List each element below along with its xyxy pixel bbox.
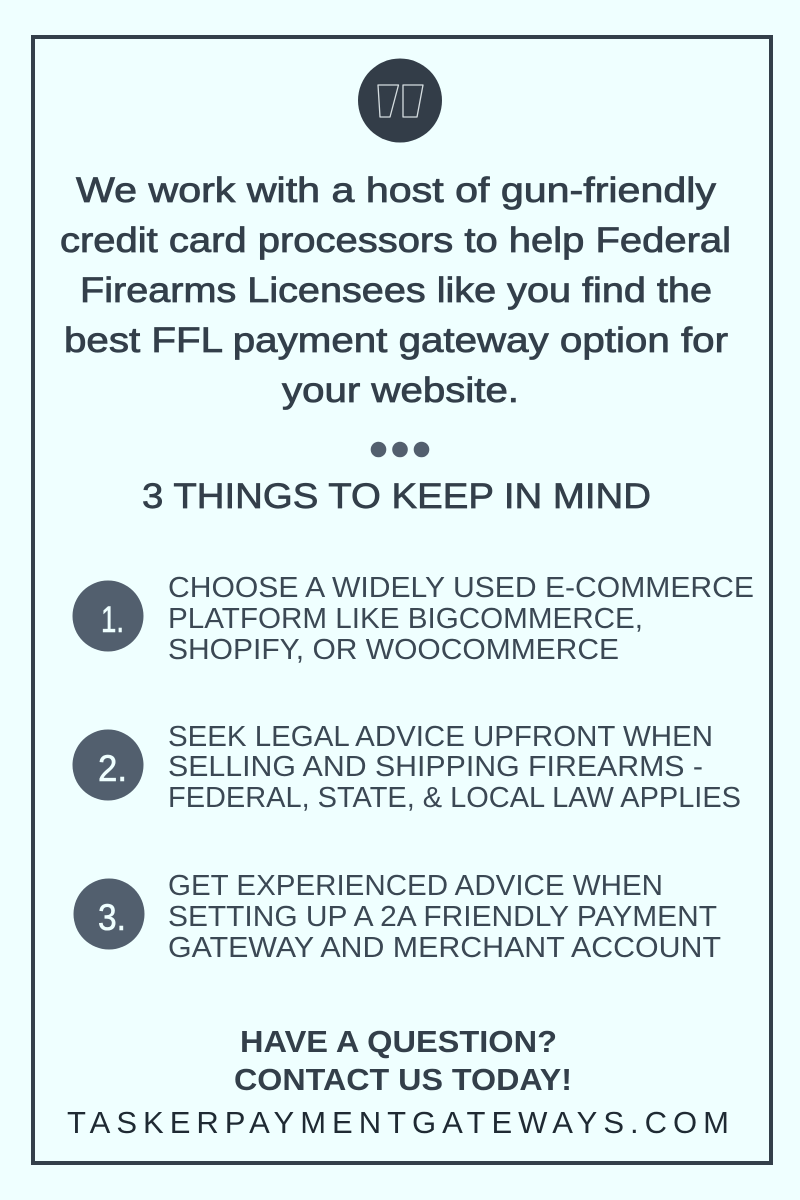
text block: introduction: credit card processors to help Federal: [60, 221, 731, 260]
text block: introduction: [60, 171, 731, 410]
call to action: CONTACT US TODAY!: [234, 1062, 572, 1097]
call to action: HAVE A QUESTION?: [240, 1024, 557, 1059]
item 1 text: SHOPIFY, OR WOOCOMMERCE: [168, 634, 619, 666]
item 2 text: [168, 721, 741, 814]
list item 3: [74, 870, 721, 964]
text block: introduction: We work with a host of gun-friendly: [76, 171, 717, 210]
text block: introduction: Firearms Licensees like you find the: [80, 271, 712, 310]
item 2 text: SEEK LEGAL ADVICE UPFRONT WHEN: [168, 721, 713, 753]
number badge 1: 1.: [101, 599, 124, 640]
item 1 text: PLATFORM LIKE BIGCOMMERCE,: [168, 603, 643, 635]
item 1 text: CHOOSE A WIDELY USED E-COMMERCE: [168, 572, 754, 604]
website url: TASKERPAYMENTGATEWAYS.COM: [67, 1105, 729, 1140]
heading: 3 things to keep in mind: 3 THINGS TO KEEP IN MIND: [142, 477, 651, 516]
item 3 text: GATEWAY AND MERCHANT ACCOUNT: [168, 932, 721, 964]
text block: introduction: your website.: [282, 371, 519, 410]
list item 1: [72, 572, 754, 666]
icon: quotation mark badge: [358, 58, 442, 142]
divider: three dots: [371, 442, 429, 457]
item 3 text: GET EXPERIENCED ADVICE WHEN: [168, 870, 663, 902]
text block: introduction: best FFL payment gateway option for: [64, 321, 728, 360]
item 3 text: SETTING UP A 2A FRIENDLY PAYMENT: [168, 901, 717, 933]
call to action: [234, 1024, 572, 1097]
item 3 text: [168, 870, 721, 964]
item 1 text: [168, 572, 754, 666]
item 2 text: SELLING AND SHIPPING FIREARMS -: [168, 751, 703, 783]
number badge 1: [72, 580, 144, 652]
number badge 3: [74, 878, 144, 950]
list item 2: [72, 721, 741, 814]
item 2 text: FEDERAL, STATE, & LOCAL LAW APPLIES: [168, 782, 741, 814]
number badge 3: 3.: [98, 897, 126, 938]
number badge 2: [72, 730, 144, 800]
number badge 2: 2.: [98, 748, 127, 789]
